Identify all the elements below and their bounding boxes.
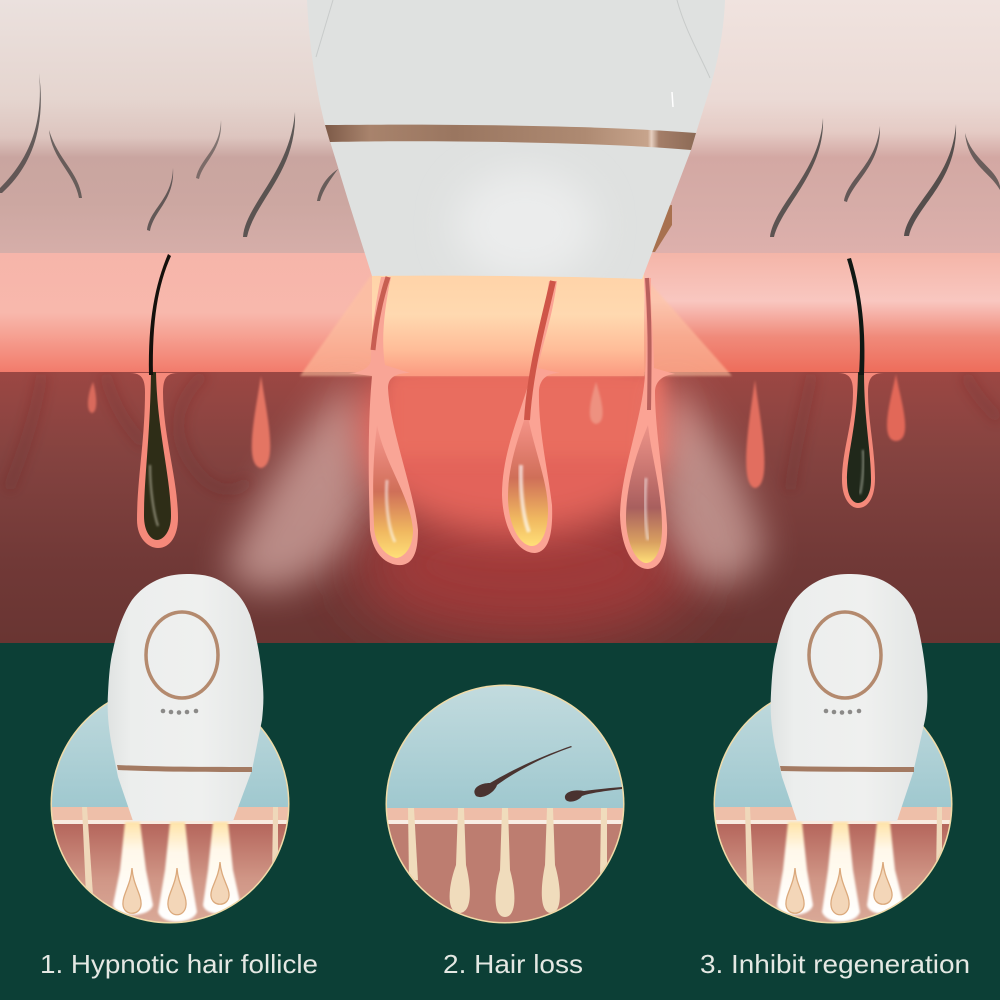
background: dermis layer: [0, 372, 1000, 643]
indicator dots: [824, 709, 861, 715]
stage 3 circle: [714, 702, 952, 924]
stage 1 circle: [50, 702, 290, 924]
small follicles, faint glow: [88, 374, 905, 488]
stage 2 circle: [386, 684, 624, 924]
background: upper skin surface: [0, 0, 1000, 254]
green footer panel: [0, 643, 1000, 1000]
label: stage 2: 2. Hair loss: [443, 949, 583, 979]
indicator dots: [161, 709, 198, 715]
background: epidermis band: [0, 253, 1000, 373]
label: stage 1: 1. Hypnotic hair follicle: [40, 949, 318, 979]
gold band: [325, 125, 696, 150]
light beam under device: [225, 274, 765, 590]
main device: [307, 0, 725, 280]
follicle: center-left glowing: [348, 277, 418, 565]
oval ring: [809, 612, 881, 698]
oval ring: [146, 612, 218, 698]
follicle: center-right glowing: [620, 278, 675, 569]
follicle: right dark hair: [838, 258, 884, 508]
gold band: [780, 766, 914, 772]
follicle: left dark hair: [130, 254, 178, 548]
stage 3 device: [771, 574, 927, 821]
follicle: center glowing: [502, 281, 560, 553]
label: stage 3: 3. Inhibit regeneration: [700, 949, 970, 979]
stage 1 device: [108, 574, 263, 821]
gold band: [117, 765, 252, 772]
falling hair: [474, 746, 622, 802]
loose hairs above skin: [0, 73, 1000, 237]
